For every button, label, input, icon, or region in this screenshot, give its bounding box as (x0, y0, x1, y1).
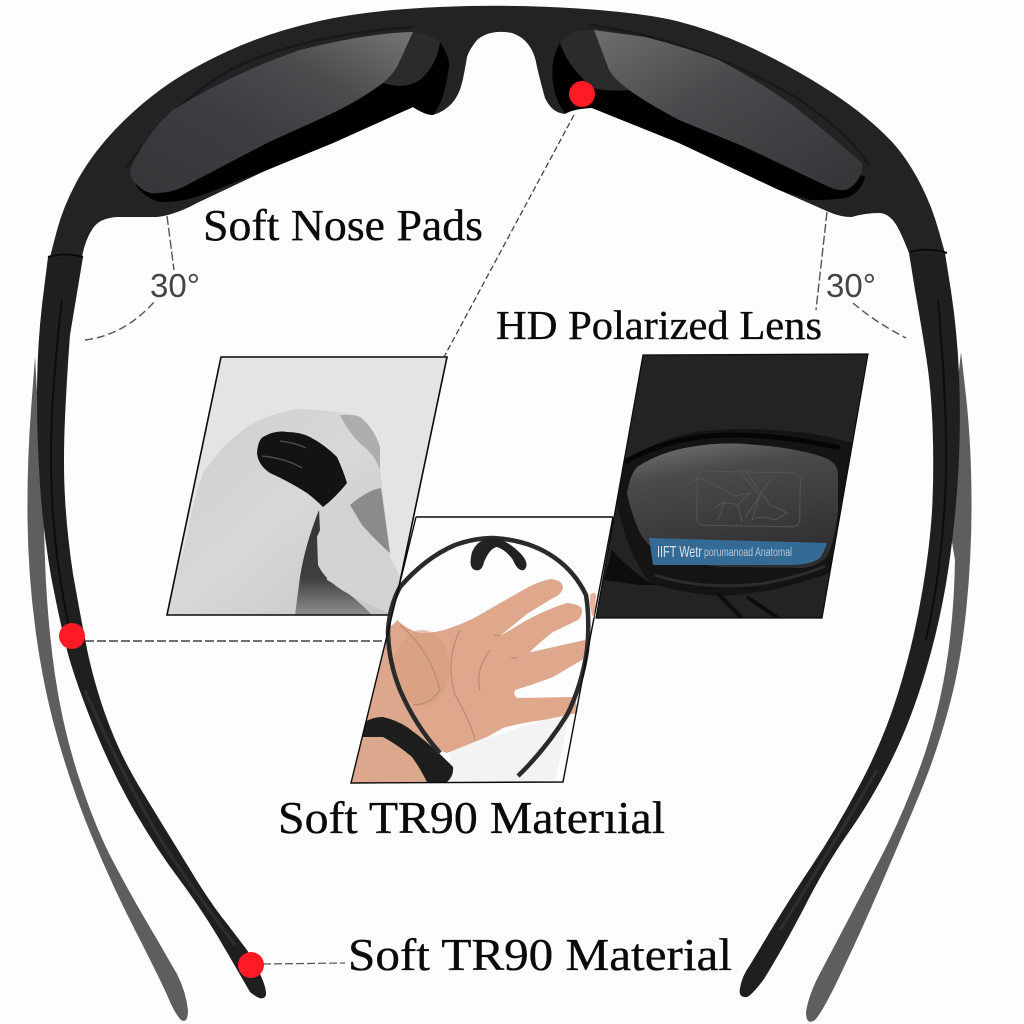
left lens (130, 32, 413, 193)
hand (390, 579, 586, 753)
lower panel shading (450, 712, 570, 782)
temple lines (717, 596, 779, 618)
label: 30 degrees right: 30° (826, 267, 876, 304)
right hinge line (910, 250, 947, 253)
panel: flexible frame in hand (351, 517, 613, 783)
left lens nose-side panel (383, 32, 440, 86)
right black temple arm (740, 253, 960, 997)
right lens (594, 30, 862, 190)
palm creases (400, 625, 517, 740)
rim top shine (625, 435, 840, 462)
frame rim (612, 429, 870, 596)
towel top-right shadow (340, 415, 380, 470)
dashed arc: left 30 degree (85, 301, 155, 340)
dashed arc: right 30 degree (853, 303, 906, 338)
label: Soft Nose Pads: Soft Nose Pads (203, 201, 483, 250)
panel: polarized lens close-up (596, 354, 870, 618)
panel: nose pad in towel (165, 357, 447, 615)
red marker: temple tip (238, 952, 264, 978)
right grey temple arm (806, 352, 972, 1022)
red marker: temple (59, 623, 85, 649)
towel silhouette (165, 409, 400, 615)
blue strip (649, 538, 827, 565)
towel right fold (317, 530, 400, 613)
left recess rim line (126, 27, 413, 168)
blue strip text: IIFT Wetr (657, 544, 702, 561)
dashed line: left 30 degree leader (167, 216, 174, 270)
label: Soft TR90 Material upper: Soft TR90 Materıial (278, 792, 665, 843)
mini glasses frame (388, 538, 588, 776)
engraved hands logo (688, 470, 800, 527)
left lens recess shadow (130, 42, 449, 202)
lens (627, 443, 838, 568)
blue strip text (657, 544, 792, 561)
right lens recess shadow (552, 43, 865, 200)
label: Soft TR90 Material lower: Soft TR90 Material (348, 929, 732, 980)
dashed leader: temple tip to label (263, 963, 345, 964)
left black temple arm (37, 257, 266, 998)
dashed leader: temple to hand panel (85, 640, 385, 642)
left grey temple arm (27, 357, 188, 1021)
thumb sliver at panel edge (590, 593, 596, 618)
towel shaded fold (350, 488, 390, 553)
thenar shading (394, 630, 450, 706)
wrist skin (351, 620, 440, 783)
right recess rim line (590, 25, 869, 165)
middle panel frame (351, 517, 613, 783)
label: 30 degrees left: 30° (150, 267, 200, 304)
black nose pad (257, 432, 347, 507)
sunglasses front frame (48, 6, 947, 257)
rim lower edge (655, 566, 825, 586)
dashed line: right 30 degree leader (816, 212, 827, 310)
nose pad highlights (262, 441, 306, 468)
label: HD Polarized Lens: HD Polarized Lens (496, 302, 822, 348)
towel dark gap (295, 510, 372, 615)
mini nose pads (471, 538, 527, 570)
strap shapes (604, 550, 656, 585)
wrist band (360, 717, 453, 782)
left hinge line (48, 254, 83, 257)
red marker: nose pad (569, 81, 595, 107)
blue strip text: porumanoad Anatomal (704, 547, 792, 559)
dashed leader: nose pad to panel (444, 115, 574, 357)
right lens nose-side panel (560, 30, 629, 91)
